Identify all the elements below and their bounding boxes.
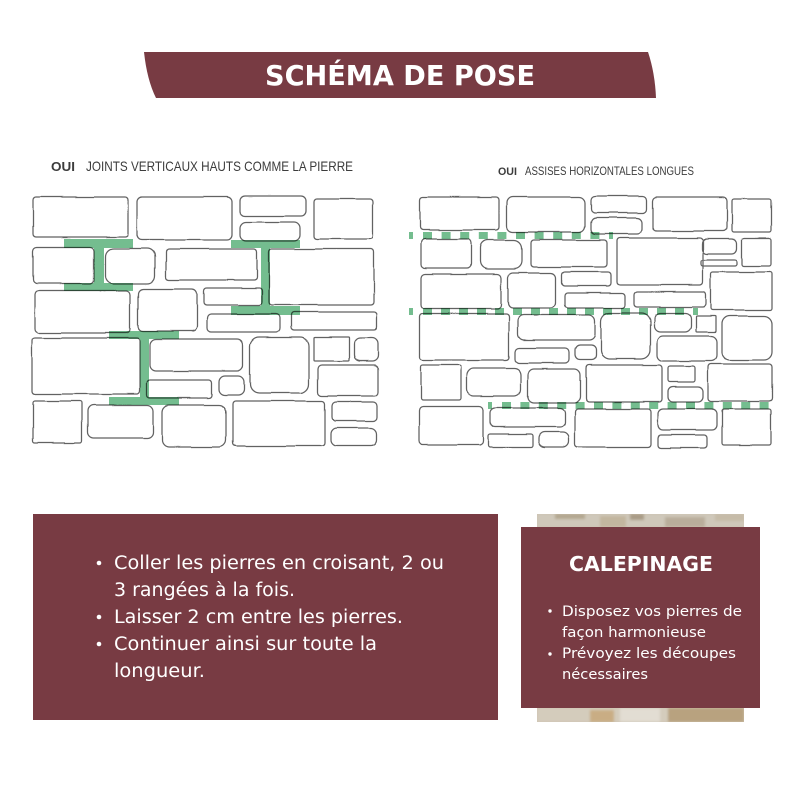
green dashed lines xyxy=(409,232,777,409)
title banner xyxy=(144,52,656,98)
heading: calepinage: CALEPINAGE xyxy=(569,552,713,576)
caption: right diagram: OUI xyxy=(498,166,517,178)
bullet list: calepinage: nécessaires xyxy=(562,667,648,683)
caption: left diagram: JOINTS VERTICAUX HAUTS COMME LA PIERRE xyxy=(86,158,353,174)
stones xyxy=(32,196,378,447)
bullet list: instructions: Coller les pierres en croisant, 2 ou xyxy=(114,553,444,574)
caption: left diagram: OUI xyxy=(51,159,75,174)
caption: right diagram: ASSISES HORIZONTALES LONGUES xyxy=(525,164,694,178)
stones xyxy=(419,196,772,448)
title: SCHÉMA DE POSE xyxy=(265,58,535,92)
bullet list: calepinage: Disposez vos pierres de xyxy=(562,604,742,620)
diagram: horizontal courses xyxy=(409,196,777,448)
bullet list: calepinage xyxy=(548,604,742,683)
diagram: vertical joints xyxy=(32,196,378,447)
bullet list: instructions: longueur. xyxy=(114,661,205,682)
panel: calepinage xyxy=(521,527,760,708)
photo: stone wall background xyxy=(537,514,744,722)
bullet list: calepinage: Prévoyez les découpes xyxy=(562,646,736,662)
bullet list: calepinage: façon harmonieuse xyxy=(562,625,706,641)
bullet list: instructions: 3 rangées à la fois. xyxy=(114,580,295,601)
bullet list: instructions: Continuer ainsi sur toute la xyxy=(114,634,377,655)
bullet list: instructions: Laisser 2 cm entre les pierres. xyxy=(114,607,403,628)
green joints xyxy=(64,239,300,405)
panel: instructions xyxy=(33,514,498,720)
bullet list: instructions xyxy=(97,553,444,682)
